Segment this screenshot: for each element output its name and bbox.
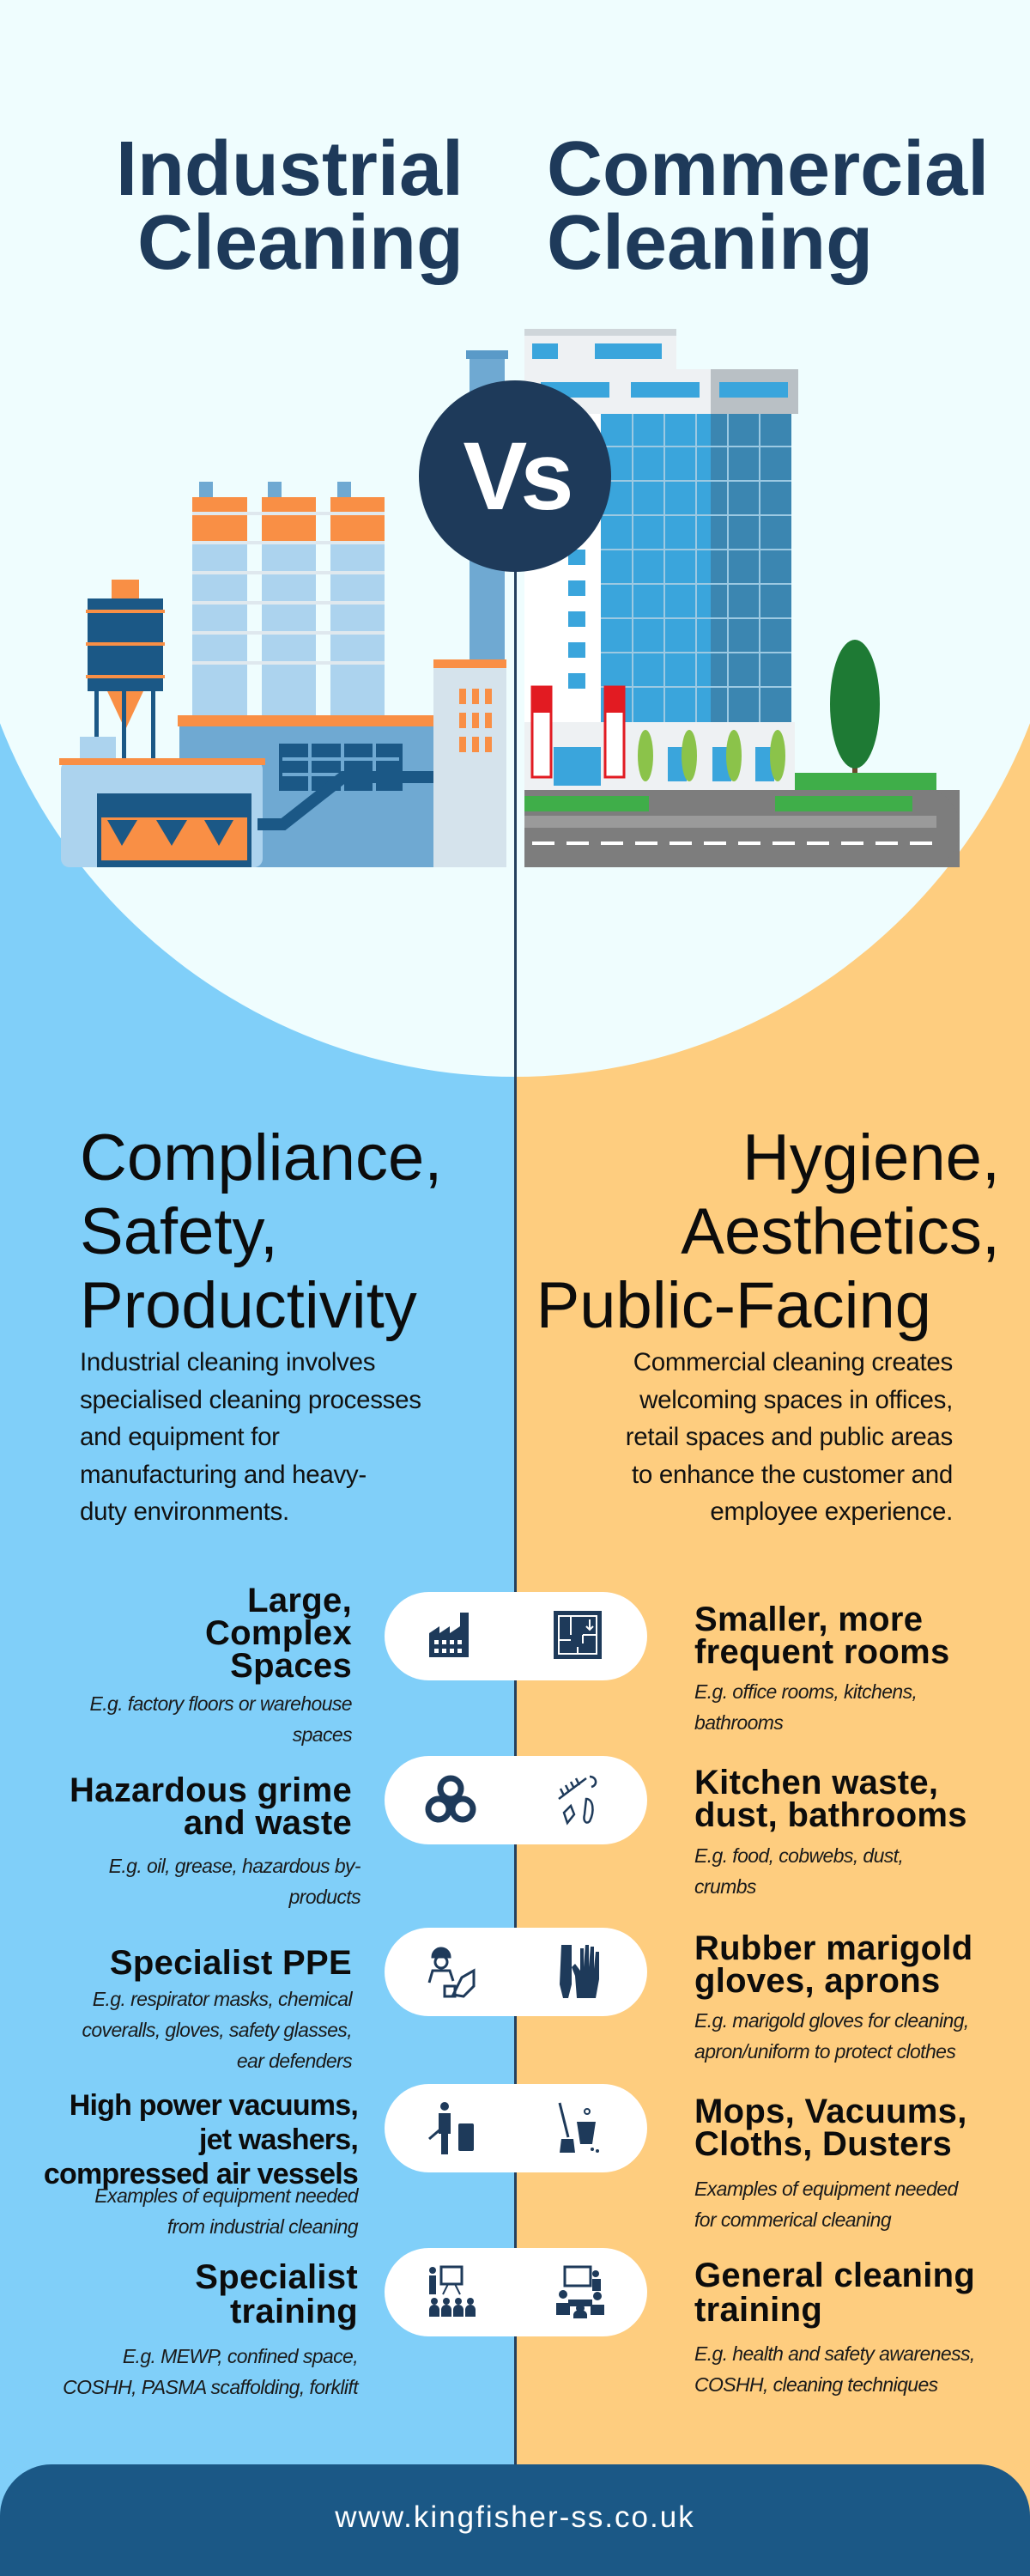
text: commercial description: to enhance the customer and [632,1460,953,1489]
icon: training presentation [429,2265,476,2317]
footer url: www.kingfisher-ss.co.uk [335,2500,695,2534]
footer [0,2464,1030,2576]
right item: general training [694,2258,975,2327]
text: commercial description [626,1348,953,1526]
left item: hazardous grime [70,1771,352,1842]
background: blue left half [0,0,515,2576]
text: commercial description: welcoming spaces in offices, [639,1386,953,1413]
left sub: factory floors: spaces [293,1723,352,1746]
text: industrial description: Industrial cleaning involves [80,1348,375,1376]
left sub: COSHH, PASMA scaffolding, forklift [63,2376,358,2398]
right sub: COSHH, cleaning techniques [694,2373,938,2396]
title: Commercial Cleaning: Cleaning [547,200,873,286]
icon: worker with jet washer [428,2102,474,2154]
left item: large complex spaces [205,1582,352,1685]
row 5 [63,2248,975,2398]
title: Industrial Cleaning: Industrial [116,126,464,212]
right item: smaller rooms: frequent rooms [694,1633,950,1671]
text: industrial description: and equipment for [80,1423,280,1451]
right item: rubber gloves: Rubber marigold [694,1929,973,1967]
text: commercial description: employee experience. [710,1498,953,1526]
left item: specialist training: training [230,2293,358,2330]
left item: large complex spaces: Large, [247,1582,352,1619]
icon: worker with PPE [427,1947,476,1998]
right sub: crumbs [694,1875,756,1898]
text: industrial description: specialised cleaning processes [80,1386,421,1413]
right item: mops [694,2093,967,2163]
right item: kitchen waste: dust, bathrooms [694,1796,967,1834]
icon: factory [429,1613,469,1657]
pill with icons [385,2248,647,2336]
text: commercial description: retail spaces and public areas [626,1423,953,1451]
right sub: E.g. food, cobwebs, dust, [694,1844,903,1867]
title: Commercial Cleaning [547,126,989,286]
row 1 [89,1582,950,1746]
icon: meeting training [556,2265,604,2318]
left sub [82,1988,354,2072]
heading: Compliance, Safety, Productivity: Compliance, [80,1121,442,1194]
text: industrial description: duty environments. [80,1498,289,1526]
right item: mops: Cloths, Dusters [694,2125,952,2163]
row 4 [44,2084,967,2238]
left sub: products [289,1886,360,1908]
right item: rubber gloves [694,1929,973,2000]
title: Industrial Cleaning [116,126,464,286]
right item: general training: training [694,2291,822,2329]
right sub [694,1680,917,1734]
text: industrial description: manufacturing and heavy- [80,1460,367,1489]
background: big light circle [0,0,1030,1077]
left sub: E.g. MEWP, confined space, [123,2345,358,2367]
left sub: coveralls, gloves, safety glasses, [82,2019,352,2041]
heading: Hygiene, Aesthetics, Public-Facing: Aesthetics, [681,1195,1000,1268]
right sub: apron/uniform to protect clothes [694,2040,955,2063]
right sub: bathrooms [694,1711,783,1734]
left sub: ear defenders [237,2050,352,2072]
left item: equipment: High power vacuums, [70,2089,358,2122]
title: Industrial Cleaning: Cleaning [137,200,464,286]
right item: general training: General cleaning [694,2257,975,2294]
icon: biohazard [426,1776,476,1822]
right sub: Examples of equipment needed [694,2178,958,2200]
right sub [694,2338,975,2400]
VS badge: Vs [464,422,566,530]
left item: equipment [44,2089,358,2190]
left item: specialist training: Specialist [195,2258,358,2296]
illustration: office building [524,329,960,867]
divider line [514,515,517,2473]
left sub: factory floors: E.g. factory floors or warehouse [89,1692,352,1715]
heading: Hygiene, Aesthetics, Public-Facing: Hygiene, [742,1121,1000,1194]
left sub [63,2345,359,2398]
left sub: E.g. respirator masks, chemical [93,1988,352,2010]
heading: Compliance, Safety, Productivity: Safety, [80,1195,278,1268]
left item: equipment: jet washers, [199,2123,358,2156]
text: industrial description [80,1348,421,1526]
heading: Compliance, Safety, Productivity: Productivity [80,1269,417,1342]
left sub: E.g. oil, grease, hazardous by- [109,1855,360,1877]
left item: hazardous grime: Hazardous grime [70,1771,352,1809]
icon: floor plan [554,1611,602,1659]
text: commercial description: Commercial cleaning creates [633,1348,953,1376]
left item: large complex spaces: Complex [205,1614,352,1652]
icon: food waste [558,1776,597,1826]
pill with icons [385,1592,647,1680]
row 3 [82,1928,973,2072]
left item: specialist training [195,2258,358,2330]
right sub: E.g. health and safety awareness, [694,2342,975,2365]
right sub [694,2178,959,2231]
right sub: E.g. marigold gloves for cleaning, [694,2009,969,2032]
left sub: from industrial cleaning [167,2215,358,2238]
right item: mops: Mops, Vacuums, [694,2093,967,2130]
right item: rubber gloves: gloves, aprons [694,1962,941,2000]
right item: kitchen waste: Kitchen waste, [694,1764,938,1801]
illustration: factory [59,350,508,867]
right item: kitchen waste [694,1764,967,1834]
left sub: Examples of equipment needed [94,2184,358,2207]
right sub [694,2009,969,2063]
pill with icons [385,1756,647,1844]
right item: smaller rooms: Smaller, more [694,1601,923,1638]
right sub [694,1844,903,1898]
icon: mop and bucket [558,2102,599,2153]
left sub [94,2184,359,2238]
pill with icons [385,1928,647,2016]
right sub: for commerical cleaning [694,2208,891,2231]
right sub: E.g. office rooms, kitchens, [694,1680,917,1703]
left sub: factory floors [89,1692,352,1746]
heading: Compliance, Safety, Productivity [80,1121,442,1342]
background: light top area [0,0,1030,525]
VS badge [419,380,611,572]
right item: smaller rooms [694,1601,950,1671]
icon: gloves [560,1945,599,1998]
left sub [109,1855,360,1908]
title: Commercial Cleaning: Commercial [547,126,989,212]
row 2 [70,1756,967,1908]
left item: specialist PPE: Specialist PPE [110,1944,352,1982]
left item: equipment: compressed air vessels [44,2158,358,2190]
left item: large complex spaces: Spaces [230,1647,352,1685]
pill with icons [385,2084,647,2172]
heading: Hygiene, Aesthetics, Public-Facing: Public-Facing [536,1269,931,1342]
left item: hazardous grime: and waste [184,1804,352,1842]
heading: Hygiene, Aesthetics, Public-Facing [536,1121,1000,1342]
